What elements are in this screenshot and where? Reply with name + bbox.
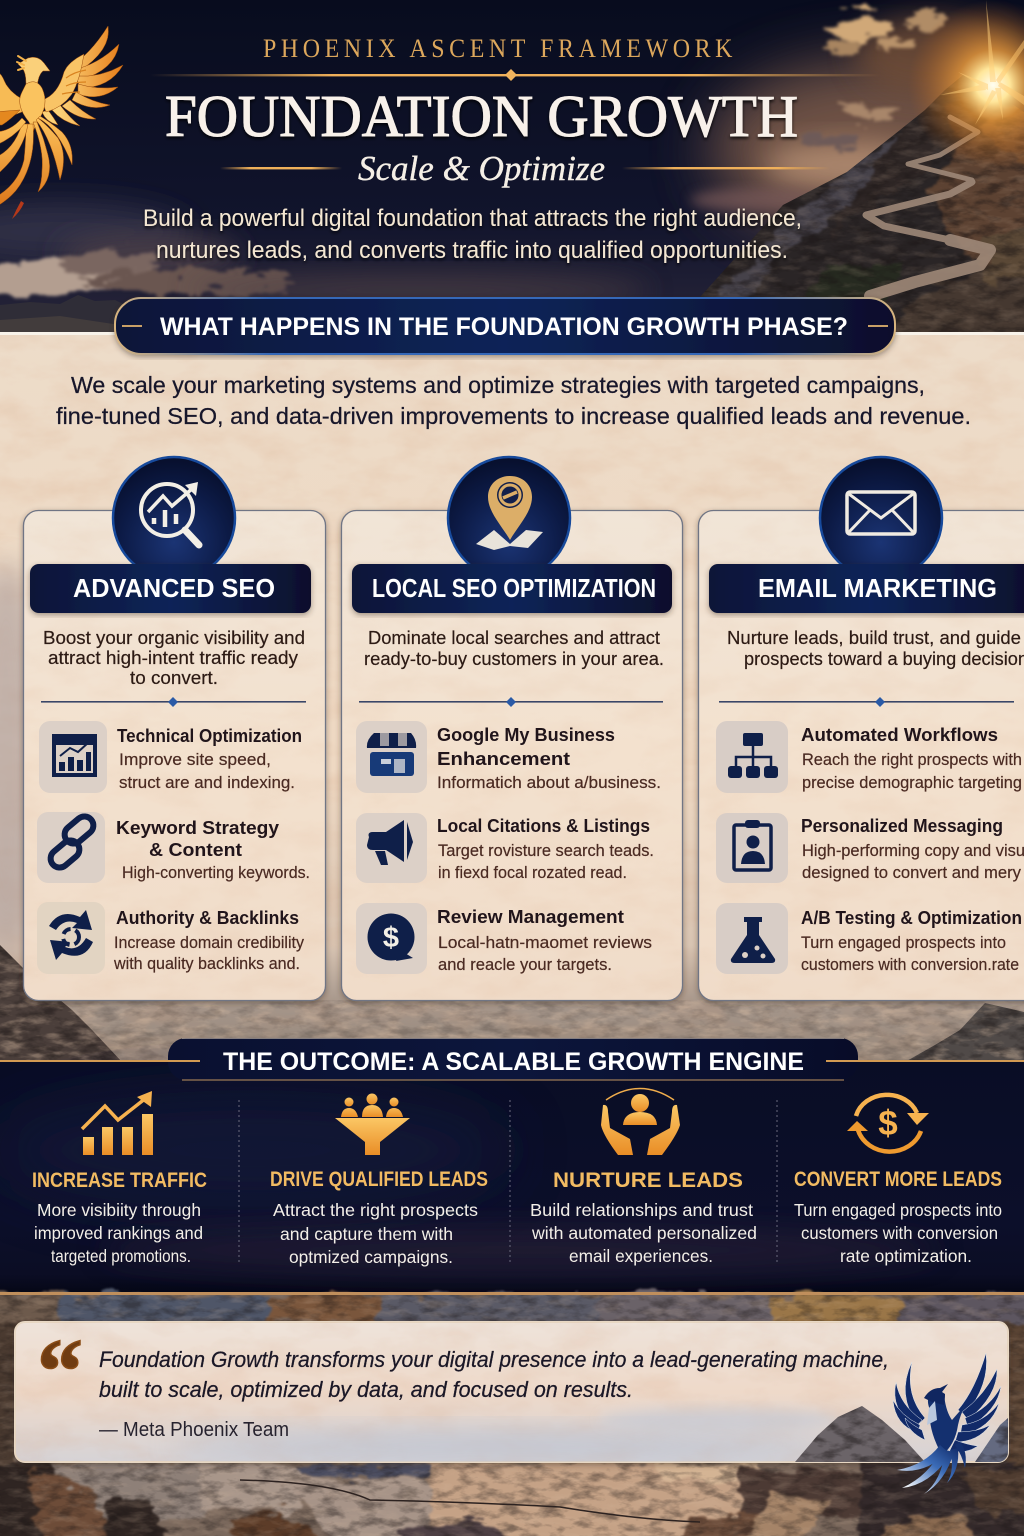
item: authority and backlinks: Increase domain credibility: [114, 934, 305, 952]
item: local citations: Local Citations & Listings: [437, 815, 650, 836]
item: keyword strategy: Keyword Strategy: [116, 817, 280, 838]
item: review management: Local-hatn-maomet reviews: [438, 934, 652, 952]
outcome: increase traffic: More visibiity through: [37, 1200, 201, 1220]
warm clouds: [802, 12, 947, 147]
heading banner: email marketing: EMAIL MARKETING: [758, 573, 997, 603]
icon: dollar conversion cycle: [847, 1095, 929, 1152]
item: automated workflows: Automated Workflows: [801, 724, 998, 745]
item: local citations: [356, 813, 654, 883]
intro paragraph: We scale your marketing systems and optimize strategies with targeted campaigns,: [71, 372, 925, 398]
parchment section background: [0, 332, 1024, 1065]
attribution: — Meta Phoenix Team: [99, 1419, 289, 1441]
rocky footer background: [0, 1292, 1024, 1536]
icon: rising bar chart: [82, 1091, 153, 1155]
section banner: the outcome: THE OUTCOME: A SCALABLE GROWTH ENGINE: [223, 1048, 804, 1076]
description: local seo: ready-to-buy customers in your area.: [364, 648, 664, 669]
phoenix emblem: orange: [0, 26, 123, 219]
item: review management: and reacle your targets.: [438, 956, 612, 974]
item: personalized messaging: [716, 813, 1024, 883]
quote text: built to scale, optimized by data, and focused on results.: [99, 1377, 633, 1402]
quote mark: “: [37, 1320, 83, 1422]
outcome: increase traffic: improved rankings and: [34, 1223, 203, 1243]
outcome: nurture leads: with automated personalized: [531, 1223, 757, 1243]
section banner: what happens: WHAT HAPPENS IN THE FOUNDATION GROWTH PHASE?: [160, 313, 848, 341]
outcome: convert more leads: rate optimization.: [840, 1246, 972, 1266]
item: google my business: Informatich about a/business.: [437, 774, 661, 792]
outcome: drive qualified leads: DRIVE QUALIFIED LEADS: [270, 1168, 488, 1191]
outcome: convert more leads: [794, 1095, 1002, 1266]
description: local seo: Dominate local searches and attract: [368, 627, 660, 648]
hero description: Build a powerful digital foundation that attracts the right audience,: [143, 205, 802, 232]
item: review management: $: [383, 922, 399, 954]
section banner: the outcome: [168, 1038, 858, 1080]
item: local citations: Target rovisture search teads.: [438, 842, 654, 860]
outcome: nurture leads: [530, 1088, 757, 1266]
outcome: increase traffic: targeted promotions.: [51, 1246, 191, 1266]
outcome: convert more leads: Turn engaged prospects into: [794, 1200, 1002, 1220]
item: automated workflows: precise demographic targeting: [802, 774, 1022, 792]
item: personalized messaging: Personalized Messaging: [801, 815, 1003, 836]
panel: email marketing: [698, 457, 1024, 1000]
item: technical optimization: Technical Optimization: [117, 725, 302, 746]
item: google my business: Google My Business: [437, 724, 615, 745]
outcome: drive qualified leads: [270, 1094, 488, 1267]
subtitle with side rules: Scale & Optimize: [358, 149, 605, 188]
item: a/b testing: Turn engaged prospects into: [801, 934, 1006, 952]
heading banner: local seo optimization: LOCAL SEO OPTIMIZATION: [372, 573, 656, 603]
heading banner: advanced seo: [30, 564, 311, 613]
item: authority and backlinks: Authority & Backlinks: [116, 907, 299, 928]
quote text: [99, 1347, 889, 1402]
outcome: convert more leads: customers with conversion: [801, 1223, 998, 1243]
item: authority and backlinks: with quality backlinks and.: [113, 955, 300, 973]
winding stone path: [866, 117, 990, 296]
item: technical optimization: [39, 721, 302, 793]
panel: advanced seo: [24, 457, 326, 1000]
title: FOUNDATION GROWTH: [165, 83, 798, 149]
section banner: what happens: [115, 298, 895, 354]
item: a/b testing: customers with conversion.rate: [801, 956, 1019, 974]
description: email marketing: Nurture leads, build trust, and guide: [727, 627, 1021, 648]
outcome: drive qualified leads: and capture them with: [280, 1224, 453, 1244]
icon: search analytics badge: [113, 457, 235, 579]
description: advanced seo: [43, 627, 305, 688]
description: email marketing: [727, 627, 1024, 669]
hero description: nurtures leads, and converts traffic into qualified opportunities.: [156, 237, 788, 264]
heading banner: local seo optimization: [352, 564, 672, 613]
sunburst: [908, 0, 1024, 170]
icon: envelope badge: [820, 457, 942, 579]
intro paragraph: fine-tuned SEO, and data-driven improvements to increase qualified leads and revenue.: [56, 403, 971, 429]
phoenix emblem: blue: [893, 1353, 1001, 1494]
description: advanced seo: to convert.: [130, 667, 218, 688]
heading banner: email marketing: [709, 564, 1024, 613]
item: personalized messaging: designed to convert and mery: [802, 864, 1022, 882]
outcome: drive qualified leads: Attract the right prospects: [273, 1200, 478, 1220]
quote card: [15, 1320, 1010, 1462]
item: automated workflows: [716, 721, 1022, 793]
description: advanced seo: attract high-intent traffic ready: [48, 647, 299, 668]
outcome band background: [0, 1060, 1024, 1293]
item: technical optimization: Improve site speed,: [119, 751, 271, 769]
eyebrow: framework name: PHOENIX ASCENT FRAMEWORK: [263, 34, 737, 63]
outcome: increase traffic: INCREASE TRAFFIC: [32, 1169, 207, 1192]
hero description: [143, 205, 802, 264]
icon: dollar conversion cycle: $: [878, 1104, 898, 1143]
item: authority and backlinks: [37, 902, 305, 974]
item: automated workflows: Reach the right prospects with: [802, 751, 1022, 769]
outcome: drive qualified leads: optmized campaigns.: [289, 1247, 453, 1267]
item: review management: [356, 903, 652, 974]
icon: hands holding person: [601, 1088, 680, 1155]
item: keyword strategy: & Content: [149, 839, 242, 860]
outcome: increase traffic: [32, 1091, 207, 1266]
eyebrow: framework name: [150, 34, 880, 81]
item: local citations: in fiexd focal rozated read.: [438, 864, 627, 882]
outcome: nurture leads: Build relationships and trust: [530, 1200, 753, 1220]
item: a/b testing: [716, 903, 1022, 974]
item: google my business: Enhancement: [437, 748, 570, 769]
intro paragraph: [56, 372, 971, 429]
icon: map pin badge: [448, 457, 570, 579]
panel: local seo optimization: [342, 457, 682, 1000]
item: review management: Review Management: [437, 906, 624, 927]
outcome: nurture leads: NURTURE LEADS: [553, 1169, 743, 1192]
description: advanced seo: Boost your organic visibility and: [43, 627, 305, 648]
outcome: nurture leads: email experiences.: [569, 1246, 713, 1266]
item: keyword strategy: [37, 812, 310, 883]
icon: funnel with people: [335, 1094, 410, 1155]
heading banner: advanced seo: ADVANCED SEO: [73, 573, 275, 603]
item: technical optimization: struct are and indexing.: [119, 774, 295, 792]
item: google my business: [356, 721, 661, 793]
description: local seo: [364, 627, 664, 669]
quote text: Foundation Growth transforms your digital presence into a lead-generating machine,: [99, 1347, 889, 1372]
item: keyword strategy: High-converting keywords.: [122, 864, 310, 882]
mountain with rock facets: [700, 75, 1024, 332]
hero background: night sky, sunrise mountain and clouds: [0, 0, 1024, 340]
